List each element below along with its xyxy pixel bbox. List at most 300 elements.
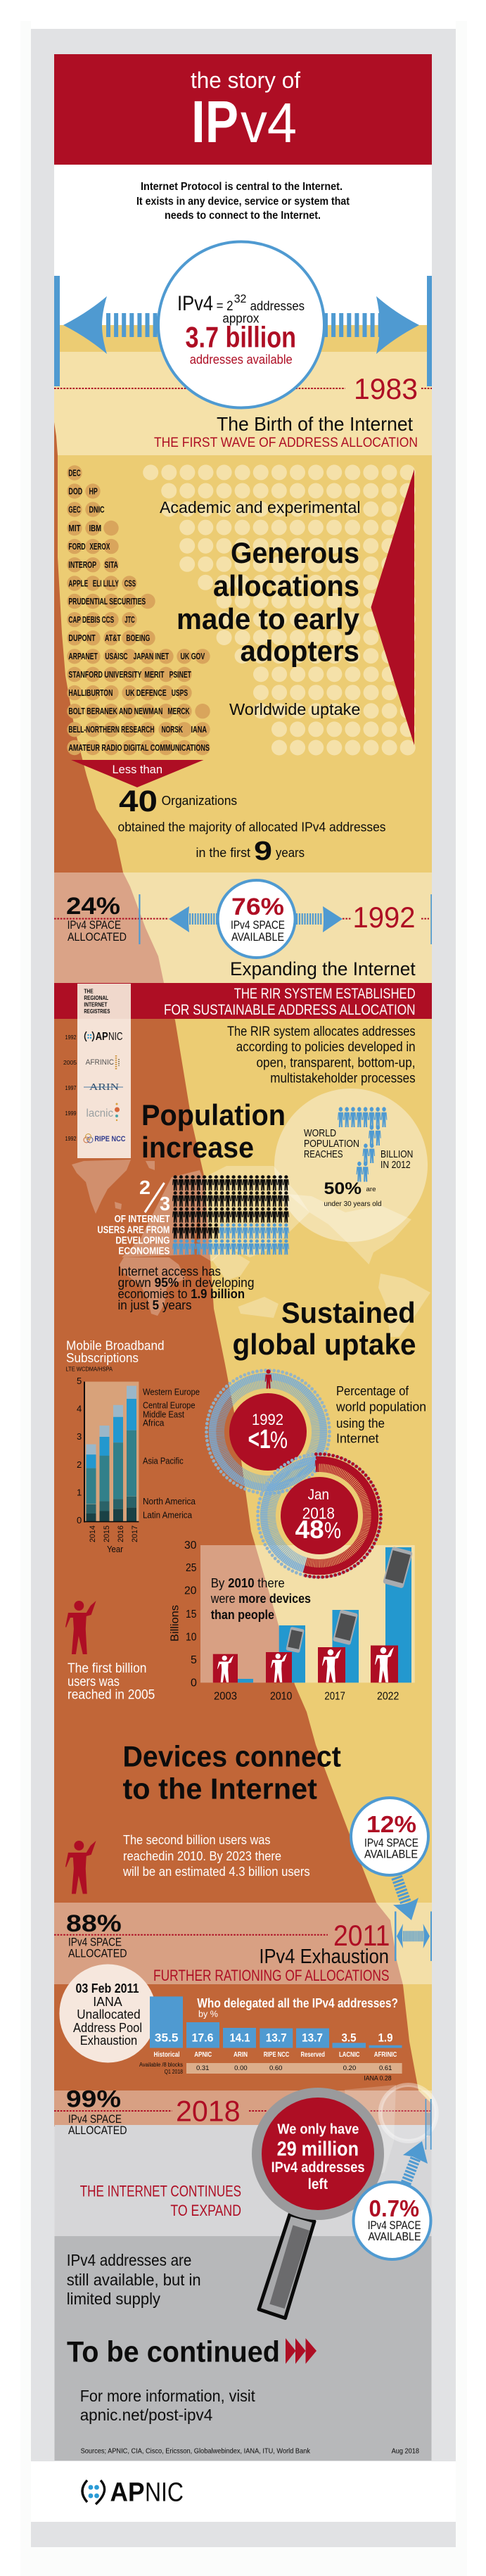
- text: limited supply: still available, but in: [67, 2271, 201, 2289]
- ring chart: January 2018 48%: %: [324, 1518, 341, 1543]
- circle: world population: BILLION: [381, 1149, 413, 1160]
- heading: 2011 IPv4 exhaustion: FURTHER RATIONING OF ALLOCATIONS: [153, 1967, 390, 1984]
- RIR policy text: multistakeholder processes: [270, 1071, 416, 1086]
- chart: mobile broadband subscriptions: 0: [77, 1515, 82, 1525]
- pictogram: two thirds of internet users: ECONOMIES: [118, 1245, 170, 1257]
- circle: IANA pool exhaustion date: 03 Feb 2011: [76, 1981, 139, 1996]
- chart: devices vs people in billions: than people: [211, 1608, 274, 1622]
- heading: 2011 IPv4 exhaustion: 2011: [333, 1919, 390, 1952]
- heading: 1983 the birth of the internet: 1983: [354, 372, 418, 405]
- stat: 88% allocated: IPv4 SPACE: [68, 1935, 122, 1949]
- light band: 2011: [54, 1903, 432, 1984]
- world map silhouette: [72, 1160, 430, 1337]
- heading: sustained global uptake: [232, 1296, 416, 1361]
- chart: devices vs people in billions: 2010: [270, 1690, 292, 1703]
- text: limited supply: IPv4 addresses are: [67, 2251, 191, 2269]
- early adopter organisations: HP: [89, 487, 98, 497]
- second billion users: The second billion users was: [123, 1833, 270, 1847]
- heading: devices connect: [122, 1740, 341, 1806]
- ring chart: 1992 less than 1%: <1: [248, 1425, 271, 1454]
- magnifying glass: 29 million left: left: [308, 2176, 328, 2193]
- early adopter organisations: PSINET: [170, 670, 191, 680]
- callout: less than 40 organizations: [71, 760, 385, 866]
- early adopter organisations: SITA: [104, 560, 118, 570]
- callout: less than 40 organizations: Organizations: [162, 794, 237, 808]
- heading: population increase: increase: [141, 1131, 254, 1164]
- chart: mobile broadband subscriptions: Year: [107, 1544, 124, 1554]
- icon: phone 2010: [286, 1627, 305, 1653]
- chart: mobile broadband subscriptions: 2017: [131, 1525, 139, 1542]
- first billion users: reached in 2005: [68, 1687, 155, 1702]
- panel: regional internet registries: NIC: [108, 1031, 122, 1043]
- circle: 0.7% available: IPv4 SPACE: [368, 2219, 421, 2232]
- circle: 3.7 billion addresses: approx: [222, 312, 259, 326]
- bars 2016: [113, 1405, 123, 1521]
- heading: 1983 the birth of the internet: [154, 372, 418, 450]
- chart: devices vs people in billions: were more devices: [210, 1592, 311, 1606]
- early adopter organisations: ELI LILLY: [93, 578, 119, 588]
- circle: world population: IN 2012: [381, 1160, 411, 1171]
- circle: world population: 50%: [324, 1179, 362, 1198]
- early adopter organisations: USAISC: [105, 652, 128, 661]
- stat: 99% allocated: IPv4 SPACE: [68, 2112, 122, 2126]
- early adopter organisations: DUPONT: [68, 633, 96, 643]
- chart: mobile broadband subscriptions: Western Europe: [143, 1387, 200, 1397]
- bars 2015: [100, 1426, 110, 1521]
- first billion users: The first billion: [68, 1661, 146, 1676]
- stat: 99% allocated: ALLOCATED: [68, 2124, 127, 2137]
- sources and date: Sources; APNIC, CIA, Cisco, Ericsson, Globalwebindex, IANA, ITU, World Bank: [81, 2447, 311, 2456]
- circle: 3.7 billion addresses: addresses available: [190, 353, 293, 367]
- second billion users: will be an estimated 4.3 billion users: [122, 1865, 310, 1879]
- early adopter organisations: PRUDENTIAL SECURITIES: [68, 597, 146, 607]
- early adopter organisations: IBM: [89, 524, 101, 533]
- chart: who delegated all the IPv4 addresses: 0.31: [196, 2064, 209, 2072]
- chart: mobile broadband subscriptions: [66, 1338, 200, 1554]
- circle: 12% available: AVAILABLE: [364, 1848, 418, 1861]
- chart: devices vs people in billions: 30: [184, 1540, 196, 1552]
- timeline rule 2018: [54, 2110, 431, 2112]
- circle: world population: are: [366, 1186, 376, 1193]
- early adopter organisations: MERIT: [144, 670, 165, 680]
- heading: 2018: 2018: [176, 2095, 241, 2128]
- chart: devices vs people in billions: 10: [186, 1632, 196, 1644]
- text: internet access growth: economies to 1.9 billion: [118, 1286, 245, 1301]
- early adopter organisations: UK DEFENCE: [125, 688, 167, 698]
- panel: regional internet registries: 1997: [65, 1085, 77, 1091]
- chart: devices vs people in billions: Billions: [169, 1605, 181, 1642]
- chart: who delegated all the IPv4 addresses: Available /8 blocks: [139, 2062, 183, 2068]
- heading: 1992 expanding the internet: Expanding the Internet: [230, 958, 416, 979]
- early adopter organisations: AT&T: [105, 633, 121, 643]
- chart: who delegated all the IPv4 addresses: Reserved: [300, 2050, 325, 2059]
- grey section: to be continued: [55, 2236, 432, 2461]
- second billion users: [65, 1833, 310, 1894]
- circle: world population: REACHES: [304, 1149, 343, 1160]
- chart: devices vs people in billions: 15: [186, 1609, 196, 1620]
- heading: generous allocations: adopters: [241, 635, 359, 667]
- banner: RIR system: [54, 983, 432, 1019]
- chart: who delegated all the IPv4 addresses: Who delegated all the IPv4 addresses?: [197, 1996, 398, 2010]
- panel: regional internet registries: AP: [96, 1031, 108, 1043]
- early adopter organisations: BELL-NORTHERN RESEARCH: [68, 725, 154, 735]
- heading: 2011 IPv4 exhaustion: IPv4 Exhaustion: [259, 1946, 389, 1968]
- chart: who delegated all the IPv4 addresses: Q1 2018: [165, 2069, 183, 2075]
- early adopter organisations: APPLE: [68, 578, 88, 588]
- early adopter organisations: BOLT BERANEK AND NEWMAN: [68, 706, 162, 716]
- callout: less than 40 organizations: Less than: [113, 763, 162, 776]
- RIR policy text: open, transparent, bottom-up,: [256, 1055, 415, 1070]
- bars 2014: [86, 1445, 96, 1521]
- circle: 3.7 billion addresses: 3.7 billion: [186, 321, 296, 353]
- early adopter organisations: FORD: [68, 542, 86, 552]
- light band: 1983: [54, 352, 432, 455]
- callout: less than 40 organizations: years: [276, 846, 305, 860]
- text: more information: [80, 2387, 255, 2424]
- early adopter organisations: AMATEUR RADIO DIGITAL COMMUNICATIONS: [68, 743, 210, 753]
- footer white logo strip: [31, 2461, 456, 2522]
- stat: 88% allocated: [66, 1910, 127, 1960]
- chart: who delegated all the IPv4 addresses: [139, 1996, 402, 2081]
- chart: mobile broadband subscriptions: 2016: [117, 1525, 125, 1542]
- bars 2017: [127, 1386, 136, 1521]
- chart: mobile broadband subscriptions: 3: [77, 1431, 82, 1442]
- magnifying glass: 29 million left: 29 million: [277, 2138, 359, 2161]
- pictogram: two thirds of internet users: DEVELOPING: [115, 1236, 170, 1247]
- text: limited supply: [67, 2251, 201, 2308]
- banner: RIR system: FOR SUSTAINABLE ADDRESS ALLOCATION: [164, 1002, 416, 1018]
- panel: regional internet registries: 1992: [65, 1136, 77, 1142]
- stat: 24% allocated: IPv4 SPACE: [68, 918, 121, 932]
- ring chart: January 2018 48%: [257, 1454, 381, 1578]
- chart: who delegated all the IPv4 addresses: RIPE NCC: [264, 2050, 290, 2059]
- heading: population increase: [141, 1098, 286, 1164]
- pictogram: two thirds of internet users: [97, 1175, 289, 1257]
- heading: generous allocations: Academic and experimental: [160, 498, 360, 516]
- circle: 76% available: AVAILABLE: [231, 930, 284, 944]
- text: internet continues to expand: THE INTERNET CONTINUES: [80, 2183, 241, 2200]
- heading: devices connect: to the Internet: [122, 1772, 317, 1806]
- text: percentage of world population: world population: [335, 1400, 426, 1414]
- circle: 3.7 billion addresses: addresses: [250, 299, 305, 313]
- panel: devices bar chart background: [200, 1545, 415, 1682]
- banner: RIR system: THE RIR SYSTEM ESTABLISHED: [234, 986, 416, 1002]
- early adopter organisations: STANFORD UNIVERSITY: [68, 670, 142, 680]
- early adopter organisations: ARPANET: [68, 652, 98, 661]
- circle: 0.7% available: [353, 2182, 430, 2259]
- chart: mobile broadband subscriptions: 2014: [89, 1525, 97, 1542]
- second billion users: reachedin 2010. By 2023 there: [123, 1849, 281, 1863]
- early adopter organisations: MIT: [68, 524, 81, 533]
- early adopter organisations: NORSK: [162, 725, 183, 735]
- chart: mobile broadband subscriptions: Asia Pacific: [143, 1456, 184, 1466]
- circle: 3.7 billion addresses: IPv4: [177, 292, 213, 315]
- sources and date: Aug 2018: [392, 2447, 419, 2456]
- title banner: IP: [191, 89, 238, 155]
- chart: who delegated all the IPv4 addresses: 14.1: [229, 2031, 250, 2045]
- early adopter organisations: JAPAN INET: [134, 652, 169, 661]
- magnifying glass: 29 million left: IPv4 addresses: [271, 2159, 365, 2176]
- heading: generous allocations: Generous: [231, 536, 359, 569]
- chart: devices vs people in billions: [169, 1540, 413, 1703]
- text: internet access growth: grown 95% in developing: [118, 1275, 255, 1290]
- chart: who delegated all the IPv4 addresses: by %: [198, 2008, 218, 2019]
- circle: IANA pool exhaustion date: IANA: [93, 1995, 122, 2009]
- panel: regional internet registries: ARIN: [89, 1082, 119, 1093]
- magnifying glass: 29 million left: [252, 2088, 384, 2318]
- heading: 1992 expanding the internet: [230, 901, 416, 979]
- circle: 12% available: 12%: [366, 1811, 416, 1837]
- text: percentage of world population: Internet: [336, 1432, 378, 1446]
- chart: devices vs people in billions: 2022: [377, 1690, 399, 1703]
- chart: devices vs people in billions: By 2010 there: [211, 1576, 285, 1590]
- chart: who delegated all the IPv4 addresses: Historical: [153, 2050, 180, 2059]
- circle: 3.7 billion addresses: = 2: [217, 299, 234, 314]
- chart: devices vs people in billions: 25: [186, 1562, 196, 1574]
- magnified beam: [345, 2085, 437, 2181]
- early adopter organisations: DNIC: [89, 505, 104, 515]
- heading: generous allocations: [160, 498, 360, 718]
- circle: 76% available: IPv4 SPACE: [231, 918, 285, 932]
- text: percentage of world population: using the: [336, 1416, 385, 1430]
- chart: mobile broadband subscriptions: 2015: [103, 1525, 111, 1542]
- ring chart: January 2018 48%: 2018: [302, 1504, 335, 1523]
- intro text: Internet Protocol is central to the Internet.: [141, 181, 343, 193]
- chart: devices vs people in billions: 5: [191, 1654, 197, 1666]
- heading: devices connect: Devices connect: [122, 1740, 341, 1773]
- title banner: the story of: [191, 68, 300, 93]
- circle: world population: POPULATION: [304, 1138, 359, 1150]
- heading: generous allocations: Worldwide uptake: [229, 700, 360, 718]
- intro text: [136, 181, 350, 222]
- timeline rule 2011: [54, 1934, 328, 1936]
- circle: 0.7% available: 0.7%: [369, 2195, 419, 2221]
- panel: regional internet registries: RIPE NCC: [94, 1135, 125, 1143]
- chart: devices vs people in billions: 0: [191, 1677, 197, 1689]
- heading: population increase: Population: [141, 1098, 286, 1131]
- text: percentage of world population: [335, 1384, 426, 1446]
- panel: regional internet registries: INTERNET: [84, 1002, 107, 1008]
- arrows: address space expanding: [54, 276, 432, 386]
- circle: world population: [274, 1089, 428, 1242]
- circle: world population: WORLD: [304, 1128, 336, 1139]
- chart: mobile broadband subscriptions: 2: [77, 1459, 82, 1470]
- ring chart: 1992 less than 1%: 1992: [252, 1411, 283, 1428]
- arrows 2011: [395, 1911, 432, 1961]
- ring chart: 1992 less than 1%: [207, 1369, 329, 1493]
- pictogram: two thirds of internet users: 3: [160, 1193, 170, 1214]
- chart: who delegated all the IPv4 addresses: LACNIC: [339, 2050, 360, 2059]
- timeline rule 1983: [54, 388, 432, 389]
- stat: 24% allocated: [66, 893, 127, 944]
- logo: APNIC: [82, 2478, 184, 2508]
- pictogram: two thirds of internet users: 2: [139, 1176, 151, 1198]
- chart: mobile broadband subscriptions: 4: [77, 1403, 82, 1414]
- early adopter organisations: IANA: [191, 725, 207, 735]
- chart: mobile broadband subscriptions: 1: [77, 1487, 82, 1498]
- heading: 1992 expanding the internet: 1992: [353, 901, 415, 934]
- panel: regional internet registries: 1992: [65, 1034, 77, 1041]
- chart: mobile broadband subscriptions: LTE WCDMA/HSPA: [66, 1366, 113, 1373]
- red side arrowhead: [371, 469, 414, 745]
- heading: sustained global uptake: Sustained: [281, 1296, 416, 1329]
- circle: 12% available: IPv4 SPACE: [364, 1836, 418, 1850]
- circle: 0.7% available: AVAILABLE: [369, 2230, 421, 2243]
- panel: regional internet registries: 1999: [65, 1110, 77, 1117]
- panel: regional internet registries: THE: [84, 989, 94, 995]
- callout: less than 40 organizations: 9: [254, 837, 272, 866]
- text: internet access growth: in just 5 years: [118, 1297, 191, 1312]
- circle: IANA pool exhaustion date: Exhaustion: [80, 2033, 137, 2048]
- heading: sustained global uptake: global uptake: [232, 1328, 416, 1361]
- logo: APNIC: AP: [110, 2478, 145, 2508]
- footer grey strip: [31, 2522, 456, 2547]
- circle: 3.7 billion addresses: [158, 242, 324, 408]
- panel: regional internet registries: REGIONAL: [84, 995, 108, 1001]
- callout: less than 40 organizations: 40: [119, 785, 158, 818]
- circle: IANA pool exhaustion date: [59, 1965, 156, 2063]
- callout: less than 40 organizations: in the first: [196, 846, 250, 860]
- timeline background: yellow: [54, 325, 432, 2126]
- chart: devices vs people in billions: 2017: [324, 1690, 345, 1703]
- logo: APNIC: NIC: [145, 2478, 184, 2508]
- early adopter organisations: USPS: [172, 688, 188, 698]
- intro text: It exists in any device, service or system that: [136, 196, 350, 208]
- white intro panel: [54, 165, 432, 326]
- chart: mobile broadband subscriptions: 5: [77, 1376, 82, 1386]
- text: percentage of world population: Percentage of: [336, 1384, 409, 1398]
- circle: 76% available: [218, 880, 295, 958]
- title banner: [54, 54, 432, 165]
- title banner: v4: [241, 91, 297, 154]
- circle: 12% available: [351, 1798, 428, 1875]
- chart: devices vs people in billions: 20: [184, 1585, 196, 1597]
- early adopter organisations: INTEROP: [68, 560, 96, 570]
- light band: 1992: [54, 873, 432, 984]
- stat: 99% allocated: 99%: [66, 2086, 121, 2113]
- stat: 24% allocated: 24%: [66, 893, 120, 920]
- heading: generous allocations: allocations: [213, 569, 359, 602]
- ring chart: January 2018 48%: Jan: [308, 1487, 329, 1503]
- circle: IANA pool exhaustion date: Address Pool: [73, 2021, 142, 2035]
- chart: who delegated all the IPv4 addresses: APNIC: [194, 2050, 212, 2059]
- stat: 88% allocated: ALLOCATED: [68, 1947, 127, 1960]
- text: more information: apnic.net/post-ipv4: [80, 2406, 212, 2424]
- early adopter organisations: GEC: [68, 505, 81, 515]
- panel: regional internet registries: [63, 984, 131, 1158]
- chart: who delegated all the IPv4 addresses: AFRINIC: [374, 2050, 397, 2059]
- chart: mobile broadband subscriptions: Middle East: [143, 1409, 184, 1420]
- first billion users: [65, 1601, 155, 1702]
- circle: world population: under 30 years old: [324, 1200, 382, 1208]
- chart: who delegated all the IPv4 addresses: 3.5: [342, 2031, 356, 2045]
- RIR policy text: according to policies developed in: [236, 1040, 416, 1055]
- magnifying glass: 29 million left: We only have: [277, 2122, 359, 2138]
- pictogram: two thirds of internet users: USERS ARE FROM: [97, 1224, 170, 1236]
- early adopter organisations: JTC: [124, 615, 135, 625]
- circle: 3.7 billion addresses: 32: [234, 292, 246, 305]
- chart: who delegated all the IPv4 addresses: 17.6: [191, 2031, 214, 2045]
- text: internet access growth: [118, 1264, 255, 1312]
- chart: who delegated all the IPv4 addresses: ARIN: [234, 2050, 248, 2059]
- icon: phone 2022: [383, 1547, 413, 1589]
- chart: who delegated all the IPv4 addresses: 13.7: [302, 2031, 323, 2045]
- chart: who delegated all the IPv4 addresses: 0.61: [379, 2064, 392, 2072]
- text: internet continues to expand: [80, 2183, 241, 2219]
- heading: 1983 the birth of the internet: THE FIRST WAVE OF ADDRESS ALLOCATION: [154, 436, 418, 450]
- light band: 2018: [54, 2090, 432, 2126]
- early adopter organisations: CSS: [124, 578, 136, 588]
- RIR policy text: The RIR system allocates addresses: [227, 1024, 416, 1039]
- early adopter organisations: MERCK: [167, 706, 190, 716]
- text: more information: For more information, visit: [80, 2387, 255, 2405]
- early adopter organisations: DEC: [68, 469, 81, 478]
- text: internet access growth: Internet access has: [118, 1264, 221, 1279]
- circle: 76% available: 76%: [231, 894, 284, 920]
- heading: 1983 the birth of the internet: The Birth of the Internet: [217, 413, 413, 435]
- chart: who delegated all the IPv4 addresses: IANA 0.28: [364, 2074, 392, 2081]
- callout: less than 40 organizations: obtained the majority of allocated IPv4 addresses: [118, 820, 385, 835]
- RIR policy text: [227, 1024, 416, 1086]
- first billion users: users was: [68, 1675, 120, 1689]
- dot field: allocated address blocks: [151, 472, 409, 747]
- chart: mobile broadband subscriptions: North America: [143, 1496, 196, 1506]
- early adopter organisations: BOEING: [126, 633, 150, 643]
- arrow: up from 0.7%: [403, 2141, 428, 2183]
- chart: who delegated all the IPv4 addresses: 0.20: [343, 2064, 356, 2072]
- chart: who delegated all the IPv4 addresses: 35.5: [155, 2031, 178, 2045]
- ring chart: 1992 less than 1%: %: [270, 1427, 288, 1454]
- chart: who delegated all the IPv4 addresses: 0.00: [234, 2064, 248, 2072]
- text: internet continues to expand: TO EXPAND: [170, 2202, 241, 2219]
- stat: 99% allocated: [66, 2086, 127, 2137]
- grey section: continues to expand: [55, 2125, 432, 2237]
- early adopter organisations: HALLIBURTON: [68, 688, 113, 698]
- arrows 1992: [139, 894, 432, 944]
- orange terrain: [54, 422, 432, 2126]
- stat: 88% allocated: 88%: [66, 1910, 122, 1937]
- early adopter organisations: CAP DEBIS CCS: [68, 615, 114, 625]
- chart: mobile broadband subscriptions: Africa: [143, 1417, 165, 1428]
- text: limited supply: limited supply: [67, 2290, 160, 2308]
- chart: mobile broadband subscriptions: Central Europe: [143, 1400, 196, 1411]
- panel: regional internet registries: AFRINIC: [86, 1058, 114, 1067]
- chart: who delegated all the IPv4 addresses: 13.7: [266, 2031, 287, 2045]
- early adopter organisations: [68, 469, 210, 753]
- panel: regional internet registries: REGISTRIES: [84, 1008, 110, 1015]
- heading: 2011 IPv4 exhaustion: [153, 1919, 390, 1984]
- chart: mobile broadband subscriptions: Subscriptions: [66, 1351, 139, 1365]
- ring chart: January 2018 48%: 48: [295, 1515, 324, 1544]
- icon: phone 2017: [333, 1609, 358, 1645]
- chart: who delegated all the IPv4 addresses: 1.9: [378, 2031, 392, 2045]
- panel: regional internet registries: lacnic: [86, 1108, 113, 1119]
- intro text: needs to connect to the Internet.: [165, 210, 321, 222]
- chart: mobile broadband subscriptions: Mobile Broadband: [66, 1338, 165, 1352]
- chart: mobile broadband subscriptions: Latin America: [143, 1510, 193, 1521]
- early adopter organisations: DOD: [68, 487, 82, 497]
- stat: 24% allocated: ALLOCATED: [68, 930, 127, 944]
- heading: to be continued: To be continued: [67, 2335, 280, 2368]
- timeline rule 1992: [54, 918, 429, 920]
- arrow: down to 2011: [393, 1877, 418, 1920]
- early adopter organisations: XEROX: [89, 542, 110, 552]
- circle: IANA pool exhaustion date: Unallocated: [77, 2007, 141, 2022]
- early adopter organisations: UK GOV: [180, 652, 205, 661]
- chart: who delegated all the IPv4 addresses: 0.60: [269, 2064, 282, 2072]
- heading: generous allocations: made to early: [177, 602, 360, 635]
- panel: regional internet registries: 2005: [63, 1060, 77, 1066]
